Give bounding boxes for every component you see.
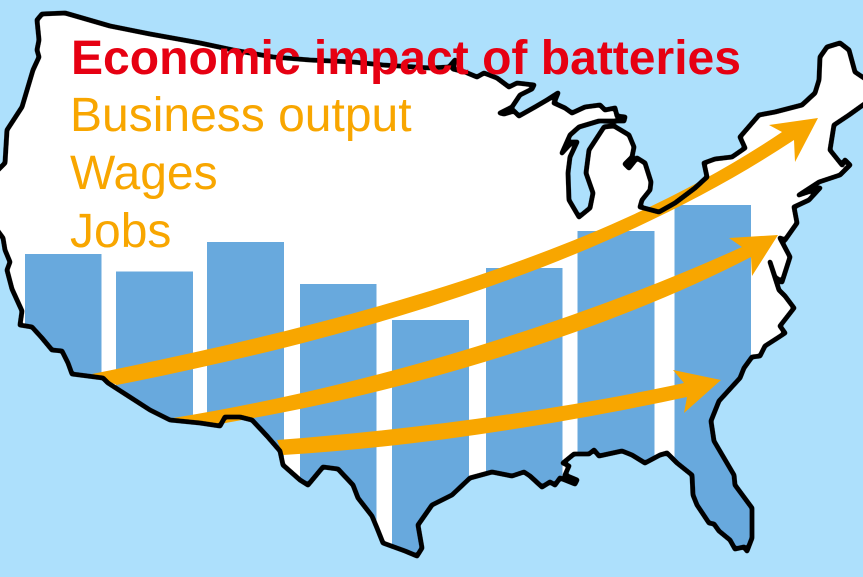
label: jobs: Jobs: [70, 205, 171, 258]
title: Economic impact of batteries: [71, 32, 741, 85]
arrow: middle rising arrow to the mid-Atlantic: [173, 235, 778, 424]
arrow: lower arrow to the southeast coast: [277, 370, 721, 455]
text block: list of impact categories: [70, 89, 412, 258]
label: wages: Wages: [70, 147, 218, 200]
arrow: upper rising arrow to the northeast: [92, 118, 818, 385]
label: business output: Business output: [70, 89, 412, 142]
bar chart: eight blue bars clipped to the map: [25, 205, 751, 577]
